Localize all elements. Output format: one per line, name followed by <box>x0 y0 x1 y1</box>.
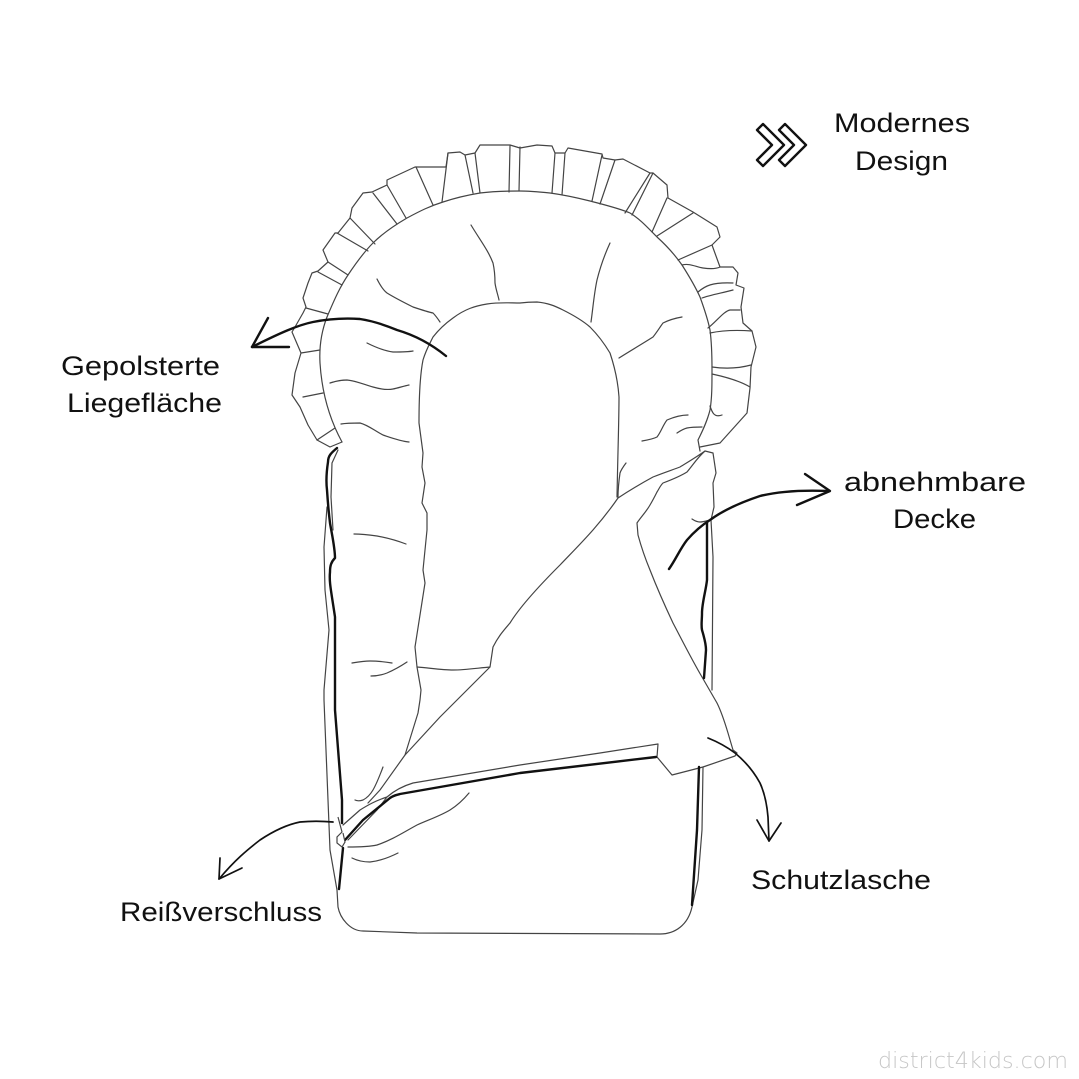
label: Reißverschluss: Reißverschluss <box>120 897 322 927</box>
right zipper <box>702 522 707 678</box>
arrow: Schutzlasche <box>708 738 781 841</box>
label: Modernes Design: Modernes <box>834 108 970 138</box>
arrow: Gepolsterte Liegefläche <box>252 318 446 356</box>
icon: double chevron <box>757 124 806 166</box>
zipper lines <box>326 448 707 905</box>
zipper pull <box>337 817 345 847</box>
ruffle outer outline <box>292 145 756 447</box>
ruffle pleats <box>301 146 752 440</box>
pad fold lines <box>330 225 710 862</box>
label: Gepolsterte Liegefläche <box>61 351 222 418</box>
lower right zipper <box>692 767 699 905</box>
inner pad arc <box>320 191 712 451</box>
label: Gepolsterte Liegefläche: Gepolsterte <box>61 351 220 381</box>
left zipper <box>326 448 343 889</box>
left seam <box>324 450 703 934</box>
illustration: baby sleeping bag <box>292 145 756 934</box>
watermark: district4kids.com <box>878 1049 1068 1074</box>
label: Modernes Design: Design <box>855 146 948 176</box>
label: abnehmbare Decke: abnehmbare <box>844 467 1026 497</box>
label: Gepolsterte Liegefläche: Liegefläche <box>67 388 222 418</box>
front zipper <box>345 757 656 840</box>
label: abnehmbare Decke: Decke <box>893 504 976 534</box>
flap right edge and outer seam <box>705 451 716 690</box>
inner opening <box>405 302 619 755</box>
label: abnehmbare Decke <box>844 467 1026 534</box>
arrow: abnehmbare Decke <box>669 474 830 569</box>
arrow: Reißverschluss <box>219 821 333 879</box>
protective flap <box>343 451 737 840</box>
label: Schutzlasche: Schutzlasche <box>751 865 931 895</box>
label: Modernes Design <box>834 108 970 176</box>
